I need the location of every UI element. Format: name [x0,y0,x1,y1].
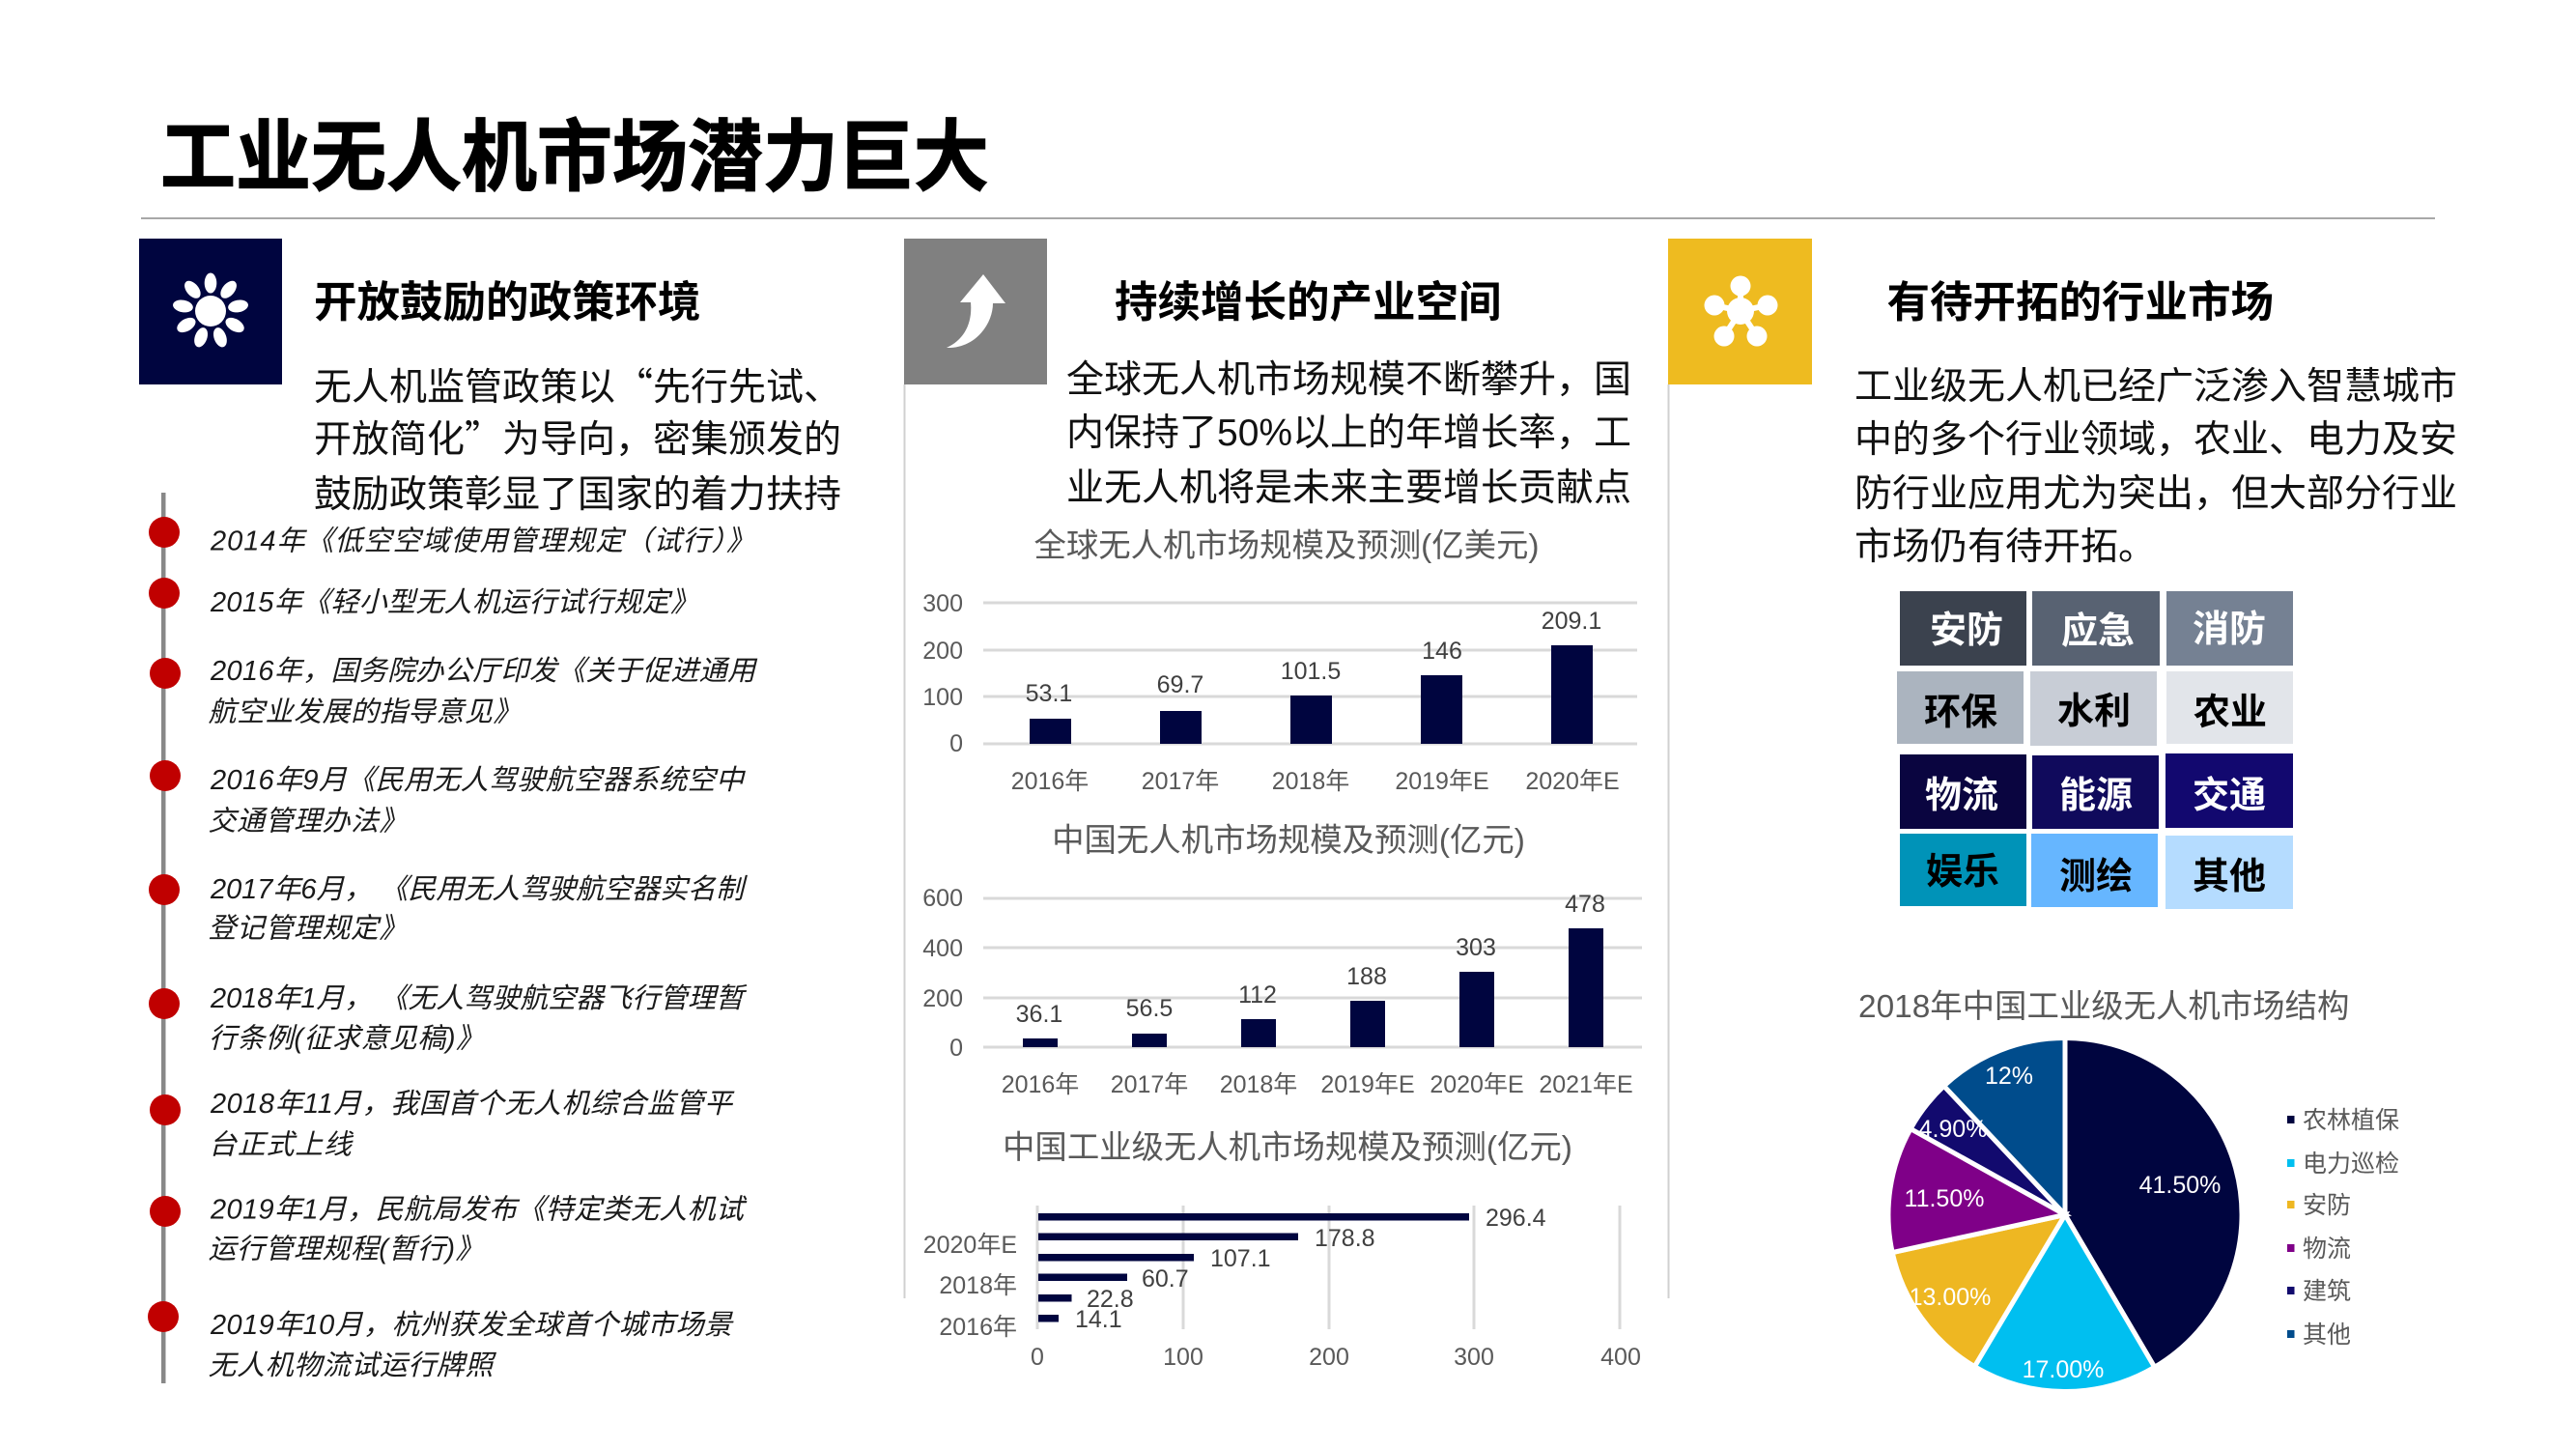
legend [2287,1107,2399,1349]
chart title: 全球无人机市场规模及预测(亿美元) [1033,528,1540,564]
sector 其他 [2166,836,2293,909]
text block: growth description [1066,350,1631,512]
sector 测绘: 测绘 [2059,857,2133,897]
text block: policy description [314,357,841,519]
text block: industry description: 中的多个行业领域，农业、电力及安 [1854,410,2457,464]
value labels: 56.5 [1126,995,1173,1022]
x axis labels [1002,1071,1633,1098]
x axis labels: 2018年 [1220,1071,1297,1098]
category labels [923,1232,1017,1341]
timeline item 2016-09: 2016年9月《民用无人驾驶航空器系统空中 [210,765,746,796]
category labels: 2018年 [939,1272,1017,1299]
value labels: 478 [1565,891,1605,918]
category labels: 2016年 [939,1314,1017,1341]
x axis labels: 2017年 [1142,768,1219,795]
icon: sun on navy square [139,239,282,384]
value labels [1026,608,1601,707]
legend: 安防 [2303,1192,2351,1219]
chart title: 中国无人机市场规模及预测(亿元) [1052,823,1525,859]
sector 水利: 水利 [2057,692,2131,732]
y axis labels: 400 [922,935,963,962]
bars [1023,928,1603,1047]
legend: 其他 [2303,1321,2351,1349]
heading: growth space: 持续增长的产业空间 [1115,279,1502,327]
panel: growth space [904,239,1642,1371]
heading: policy environment: 开放鼓励的政策环境 [314,279,701,327]
pie labels: 13.00% [1910,1284,1991,1311]
value labels: 209.1 [1542,608,1601,635]
text block: industry description [1854,356,2457,571]
timeline item 2016-09: 交通管理办法》 [209,806,408,837]
timeline item 2014 [149,517,754,556]
sector 测绘 [2031,834,2158,907]
chart: China market size [922,823,1642,1098]
y axis labels [922,590,963,757]
timeline item 2015 [149,578,698,618]
timeline item 2015: 2015年《轻小型无人机运行试行规定》 [210,587,698,618]
value labels: 53.1 [1026,680,1072,707]
sector 能源: 能源 [2059,776,2133,816]
text block: growth description: 内保持了50%以上的年增长率，工 [1066,412,1631,454]
x axis labels: 100 [1163,1344,1203,1371]
timeline item 2014: 2014年《低空空域使用管理规定（试行）》 [210,526,754,556]
value labels [1075,1205,1546,1333]
text block: industry description: 工业级无人机已经广泛渗入智慧城市 [1854,356,2457,411]
value labels: 36.1 [1016,1001,1062,1028]
sector 娱乐 [1900,834,2026,906]
legend: 物流 [2303,1236,2351,1263]
y axis labels [922,885,963,1062]
x axis labels: 2017年 [1111,1071,1188,1098]
pie labels [1905,1063,2221,1383]
sector 安防 [1900,591,2026,666]
sector 交通: 交通 [2193,776,2266,816]
x axis labels: 2020年E [1525,768,1620,795]
value labels: 112 [1238,981,1277,1009]
sector 农业: 农业 [2194,693,2267,733]
timeline item 2018-11 [150,1089,735,1161]
x axis labels: 2016年 [1011,768,1089,795]
chart: China industrial market size [923,1130,1641,1371]
text block: policy description: 鼓励政策彰显了国家的着力扶持 [314,465,841,519]
chart title: 中国工业级无人机市场规模及预测(亿元) [1003,1130,1572,1166]
x axis labels: 0 [1031,1344,1044,1371]
sector 能源 [2032,755,2159,829]
text block: industry description: 防行业应用尤为突出，但大部分行业 [1854,464,2457,518]
x axis labels: 2021年E [1539,1071,1633,1098]
x axis labels [1031,1344,1641,1371]
x axis labels: 2020年E [1430,1071,1524,1098]
value labels: 146 [1422,638,1462,665]
sector 物流: 物流 [1925,776,1998,816]
timeline item 2019-01: 运行管理规程(暂行)》 [209,1235,483,1265]
value labels: 107.1 [1210,1245,1271,1272]
timeline item 2017-06: 登记管理规定》 [209,914,408,945]
y axis labels: 600 [922,885,963,912]
sector 农业 [2166,671,2293,744]
timeline item 2019-10: 2019年10月，杭州获发全球首个城市场景 [210,1310,734,1341]
panel: industry market [1668,239,2457,1392]
value labels: 188 [1346,963,1387,990]
horizontal bars [1038,1213,1469,1321]
title: 工业无人机市场潜力巨大 [160,114,989,201]
legend: 电力巡检 [2303,1151,2399,1178]
timeline item 2019-10 [148,1301,734,1381]
panel: policy environment [139,239,841,519]
y axis labels: 100 [922,684,963,711]
grid: industry sectors [1897,591,2293,909]
sector 环保: 环保 [1924,693,1997,733]
x axis labels: 2016年 [1002,1071,1079,1098]
chart: 2018 market structure pie [1858,989,2399,1392]
text block: policy description: 无人机监管政策以“先行先试、 [314,357,841,412]
text block: growth description: 业无人机将是未来主要增长贡献点 [1066,458,1631,512]
timeline item 2017-06: 2017年6月， 《民用无人驾驶航空器实名制 [210,874,748,905]
sector 其他: 其他 [2193,857,2266,897]
timeline item 2019-10: 无人机物流试运行牌照 [209,1350,496,1381]
x axis labels: 400 [1600,1344,1641,1371]
value labels: 60.7 [1142,1265,1189,1293]
x axis labels: 300 [1454,1344,1494,1371]
value labels: 69.7 [1157,671,1203,698]
legend: 农林植保 [2303,1107,2399,1134]
value labels: 101.5 [1281,658,1341,685]
sector 消防 [2166,591,2293,666]
timeline item 2018-01: 行条例(征求意见稿)》 [209,1024,484,1055]
y axis labels: 200 [922,638,963,665]
value labels: 296.4 [1486,1205,1546,1232]
value labels: 178.8 [1315,1225,1375,1252]
text block: industry description: 市场仍有待开拓。 [1854,517,2156,571]
y axis labels: 0 [949,730,963,757]
timeline item 2017-06 [149,874,748,945]
y axis labels: 300 [922,590,963,617]
sector 环保 [1897,671,2024,744]
heading: industry market: 有待开拓的行业市场 [1887,279,2274,327]
y axis labels: 0 [949,1035,963,1062]
icon: network on yellow square [1668,239,1812,384]
x axis labels [1011,768,1620,795]
sector 应急 [2032,591,2160,666]
pie slices [1888,1037,2242,1392]
bars [1030,645,1593,744]
timeline item 2016 [150,656,758,728]
icon: up arrow on grey square [904,239,1047,384]
pie labels: 17.00% [2023,1356,2104,1383]
x axis labels: 2019年E [1395,768,1489,795]
x axis labels: 2019年E [1320,1071,1415,1098]
timeline item 2018-01 [149,983,748,1055]
pie labels: 4.90% [1919,1116,1987,1143]
timeline item 2016-09 [150,760,746,837]
timeline: policy milestones [148,493,758,1383]
category labels: 2020年E [923,1232,1017,1259]
x axis labels: 2018年 [1272,768,1349,795]
chart: global market size [922,528,1637,795]
pie labels: 11.50% [1905,1185,1984,1212]
pie labels: 12% [1985,1063,2033,1090]
timeline item 2019-01: 2019年1月，民航局发布《特定类无人机试 [210,1194,748,1225]
timeline item 2016: 航空业发展的指导意见》 [209,697,522,728]
x axis labels: 200 [1309,1344,1349,1371]
text block: policy description: 开放简化”为导向，密集颁发的 [314,410,841,464]
text block: growth description: 全球无人机市场规模不断攀升，国 [1066,350,1631,404]
value labels: 303 [1456,934,1496,961]
value labels: 14.1 [1075,1306,1122,1333]
sector 物流 [1900,754,2026,829]
chart title: 2018年中国工业级无人机市场结构 [1858,989,2349,1025]
timeline item 2018-01: 2018年1月， 《无人驾驶航空器飞行管理暂 [210,983,748,1014]
sector 安防: 安防 [1930,611,2003,651]
timeline item 2019-01 [150,1194,748,1265]
sector 应急: 应急 [2061,611,2135,652]
sector 娱乐: 娱乐 [1926,852,1999,893]
timeline item 2016: 2016年，国务院办公厅印发《关于促进通用 [210,656,758,687]
sector 消防: 消防 [2193,610,2266,650]
legend: 建筑 [2303,1278,2351,1305]
value labels: 22.8 [1087,1286,1134,1313]
timeline item 2018-11: 2018年11月，我国首个无人机综合监管平 [210,1089,735,1120]
pie labels: 41.50% [2139,1172,2221,1199]
value labels [1016,891,1605,1028]
y axis labels: 200 [922,985,963,1012]
timeline item 2018-11: 台正式上线 [209,1130,354,1161]
sector 交通 [2166,753,2293,828]
sector 水利 [2030,671,2157,746]
